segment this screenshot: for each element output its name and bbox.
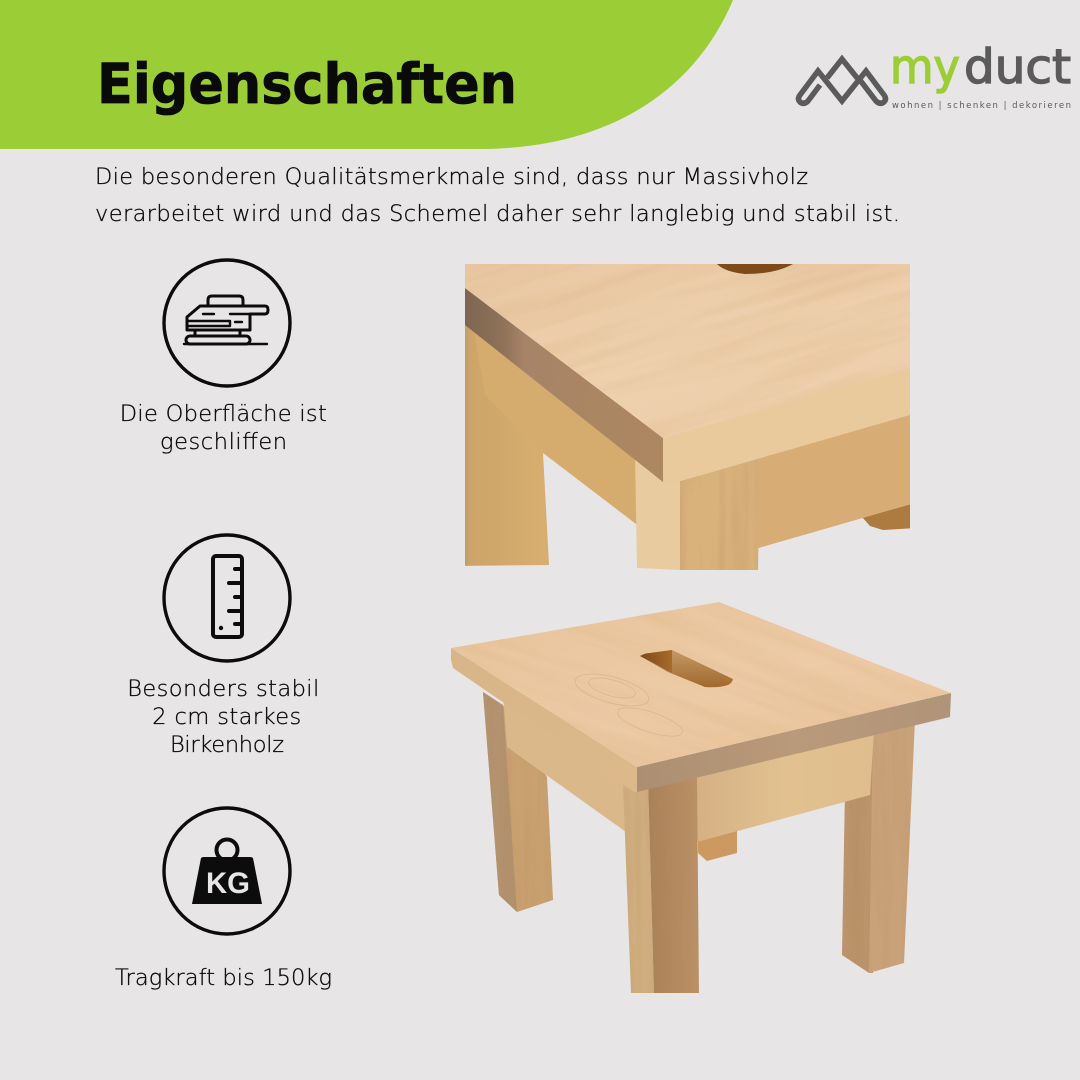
label: sanded surface: geschliffen (160, 429, 287, 455)
label: sanded surface: Die Oberfläche ist (120, 401, 327, 427)
icon: weight (164, 808, 290, 934)
close-up front edge of seat (663, 366, 910, 485)
centre front leg (623, 778, 699, 993)
logo wordmark duct: duct (964, 40, 1071, 95)
left apron (503, 695, 628, 832)
close-up leg light face (635, 455, 680, 570)
seat right edge (637, 693, 951, 792)
seat left edge (451, 648, 637, 792)
label: stable thickness: Birkenholz (170, 732, 284, 758)
feature: stable thickness (127, 535, 327, 758)
logo: myduct (798, 40, 1071, 111)
feature: load capacity (115, 808, 332, 991)
icon: ruler (164, 535, 290, 661)
rear left leg (483, 692, 553, 912)
intro line 2: verarbeitet wird und das Schemel daher sehr langlebig und stabil ist. (95, 201, 900, 227)
label: stable thickness: Besonders stabil (127, 676, 319, 702)
seat top with grain (452, 602, 950, 767)
front apron (694, 730, 874, 842)
green header shape (0, 0, 733, 149)
close-up back leg (863, 504, 910, 530)
close-up front apron (758, 415, 910, 548)
rear right leg stub (698, 825, 737, 861)
close-up rear left leg (465, 325, 549, 566)
close-up left apron (475, 334, 636, 524)
close-up leg front face (680, 460, 758, 570)
feature: sanded surface (120, 260, 334, 455)
icon: weight: KG (206, 867, 250, 900)
label: load capacity: Tragkraft bis 150kg (115, 965, 332, 991)
photo: close-up of stool corner (465, 264, 910, 570)
intro text (95, 164, 900, 227)
hand hole (640, 650, 733, 687)
title: Eigenschaften (97, 52, 517, 116)
close-up left edge of seat (465, 288, 663, 482)
intro line 1: Die besonderen Qualitätsmerkmale sind, dass nur Massivholz (95, 164, 808, 190)
icon: sander (164, 260, 290, 386)
close-up seat top (465, 264, 910, 438)
photo: full stool (451, 602, 951, 993)
label: stable thickness: 2 cm starkes (152, 704, 301, 730)
logo wordmark my: my (890, 40, 960, 95)
logo tagline: wohnen | schenken | dekorieren (892, 101, 1071, 111)
logo mountains icon (798, 59, 886, 103)
right front leg (842, 726, 915, 973)
